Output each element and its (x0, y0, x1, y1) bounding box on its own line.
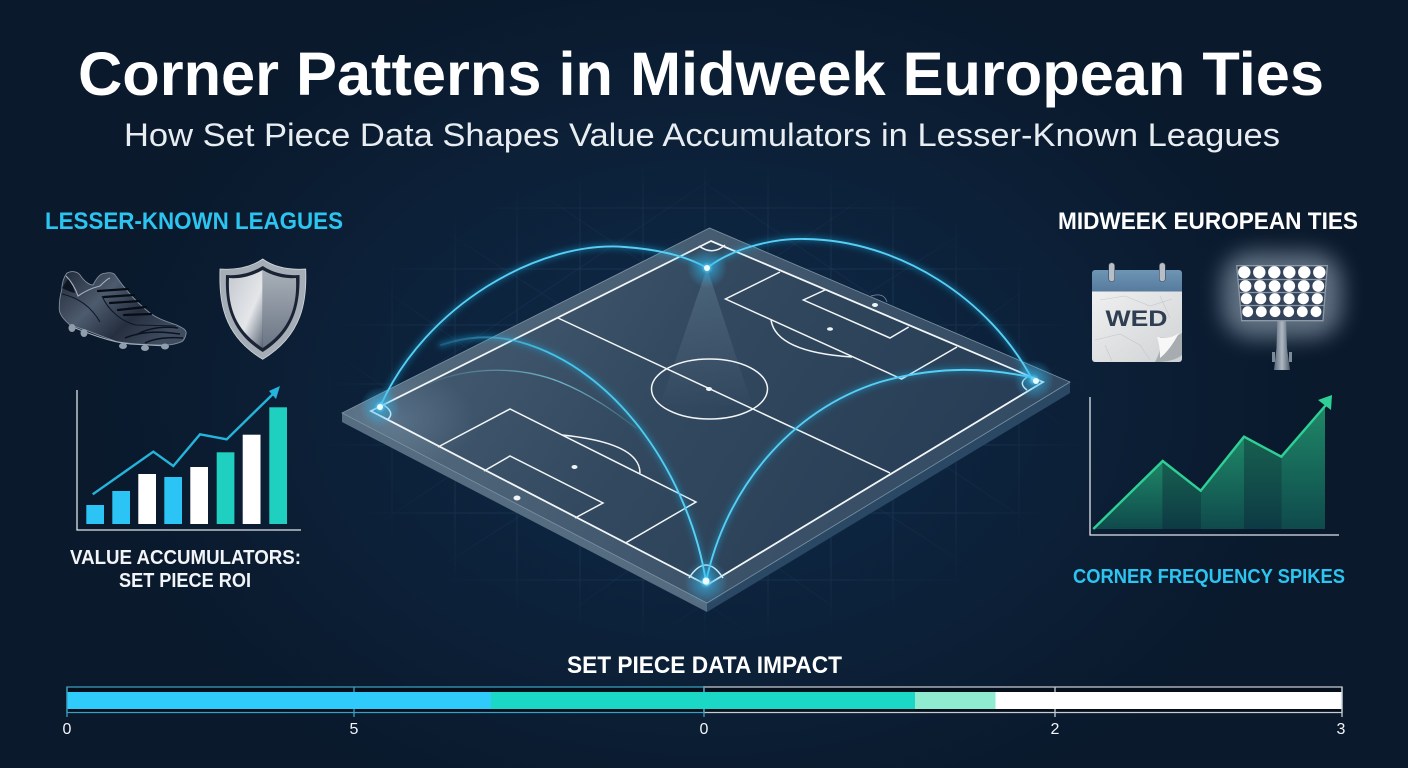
icon: stadium floodlight (1222, 252, 1342, 370)
trend arrow (93, 386, 280, 494)
scale labels: 0 (63, 721, 72, 738)
chart axes (1090, 397, 1339, 535)
caption: value accumulators: SET PIECE ROI (119, 570, 251, 592)
glowing corner nodes (360, 248, 1054, 604)
title: Corner Patterns in Midweek European Ties (78, 40, 1324, 108)
heading: midweek european ties: MIDWEEK EUROPEAN TIES (1058, 208, 1358, 235)
icon: shield (220, 259, 306, 359)
panel: lesser-known leagues (45, 208, 343, 592)
scale labels: 5 (350, 721, 359, 738)
pitch slab (315, 228, 1070, 612)
caption: corner frequency spikes: CORNER FREQUENCY SPIKES (1073, 566, 1345, 588)
icon: calendar (1092, 263, 1182, 362)
scale labels: 0 (700, 721, 709, 738)
scale labels: 3 (1337, 721, 1346, 738)
caption: value accumulators (70, 547, 301, 592)
caption: value accumulators: VALUE ACCUMULATORS: (70, 547, 301, 569)
trend arrow (1093, 395, 1332, 529)
panel: midweek european ties (1058, 208, 1358, 588)
area fill (1093, 407, 1325, 529)
panel: isometric football pitch (315, 228, 1070, 612)
area chart: corner frequency (1090, 395, 1339, 535)
icon: calendar: WED (1106, 306, 1168, 331)
pitch markings (371, 241, 1043, 585)
bar chart: set piece ROI (77, 386, 301, 530)
subtitle: How Set Piece Data Shapes Value Accumulators in Lesser-Known Leagues (124, 117, 1280, 153)
chart bars (86, 407, 287, 524)
icon: football boot (59, 272, 186, 351)
scale labels (63, 721, 1346, 738)
progress bar (67, 687, 1342, 717)
scale labels: 2 (1051, 721, 1060, 738)
heading: lesser-known leagues: LESSER-KNOWN LEAGUES (45, 208, 343, 235)
chart axes (77, 390, 301, 530)
panel: set piece data impact (63, 652, 1346, 738)
corner trajectory arcs (380, 239, 1034, 582)
heading: set piece data impact: SET PIECE DATA IMPACT (567, 652, 842, 679)
